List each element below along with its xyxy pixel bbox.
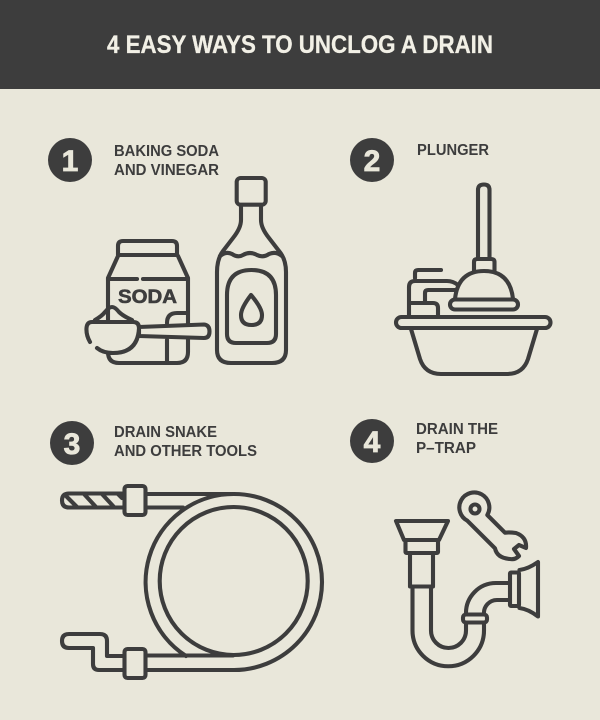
icon: soda box with scoop bbox=[86, 241, 210, 363]
step 1 heading bbox=[114, 143, 219, 179]
step 1 heading: BAKING SODA bbox=[114, 143, 219, 160]
drop bbox=[241, 295, 262, 325]
icon: drain snake bbox=[62, 486, 322, 678]
step 3 heading: AND OTHER TOOLS bbox=[114, 443, 257, 460]
step 3 number badge: 3 bbox=[64, 428, 80, 461]
step 3 heading: DRAIN SNAKE bbox=[114, 424, 217, 441]
step 1 heading: AND VINEGAR bbox=[114, 162, 219, 179]
soda label: SODA bbox=[118, 286, 177, 308]
step 1 number badge bbox=[48, 138, 92, 182]
step 1 number badge: 1 bbox=[62, 145, 78, 178]
icon: p-trap and wrench bbox=[396, 492, 538, 666]
step 4 heading: P–TRAP bbox=[416, 440, 476, 457]
step 3 heading bbox=[114, 424, 257, 460]
icon: vinegar bottle bbox=[217, 178, 286, 363]
bottle label bbox=[227, 270, 276, 343]
step 3 number badge bbox=[50, 421, 94, 465]
liquid level bbox=[220, 253, 282, 256]
step 4 number badge bbox=[350, 419, 394, 463]
step 4 heading: DRAIN THE bbox=[416, 421, 498, 438]
title: 4 EASY WAYS TO UNCLOG A DRAIN bbox=[107, 31, 493, 59]
header band bbox=[0, 0, 600, 89]
step 2 heading: PLUNGER bbox=[417, 142, 489, 159]
step 2 number badge bbox=[350, 138, 394, 182]
step 4 number badge: 4 bbox=[364, 426, 381, 459]
icon: plunger in basin bbox=[396, 184, 550, 374]
step 4 heading bbox=[416, 421, 498, 457]
step 2 number badge: 2 bbox=[364, 145, 380, 178]
wrench bbox=[459, 492, 526, 559]
